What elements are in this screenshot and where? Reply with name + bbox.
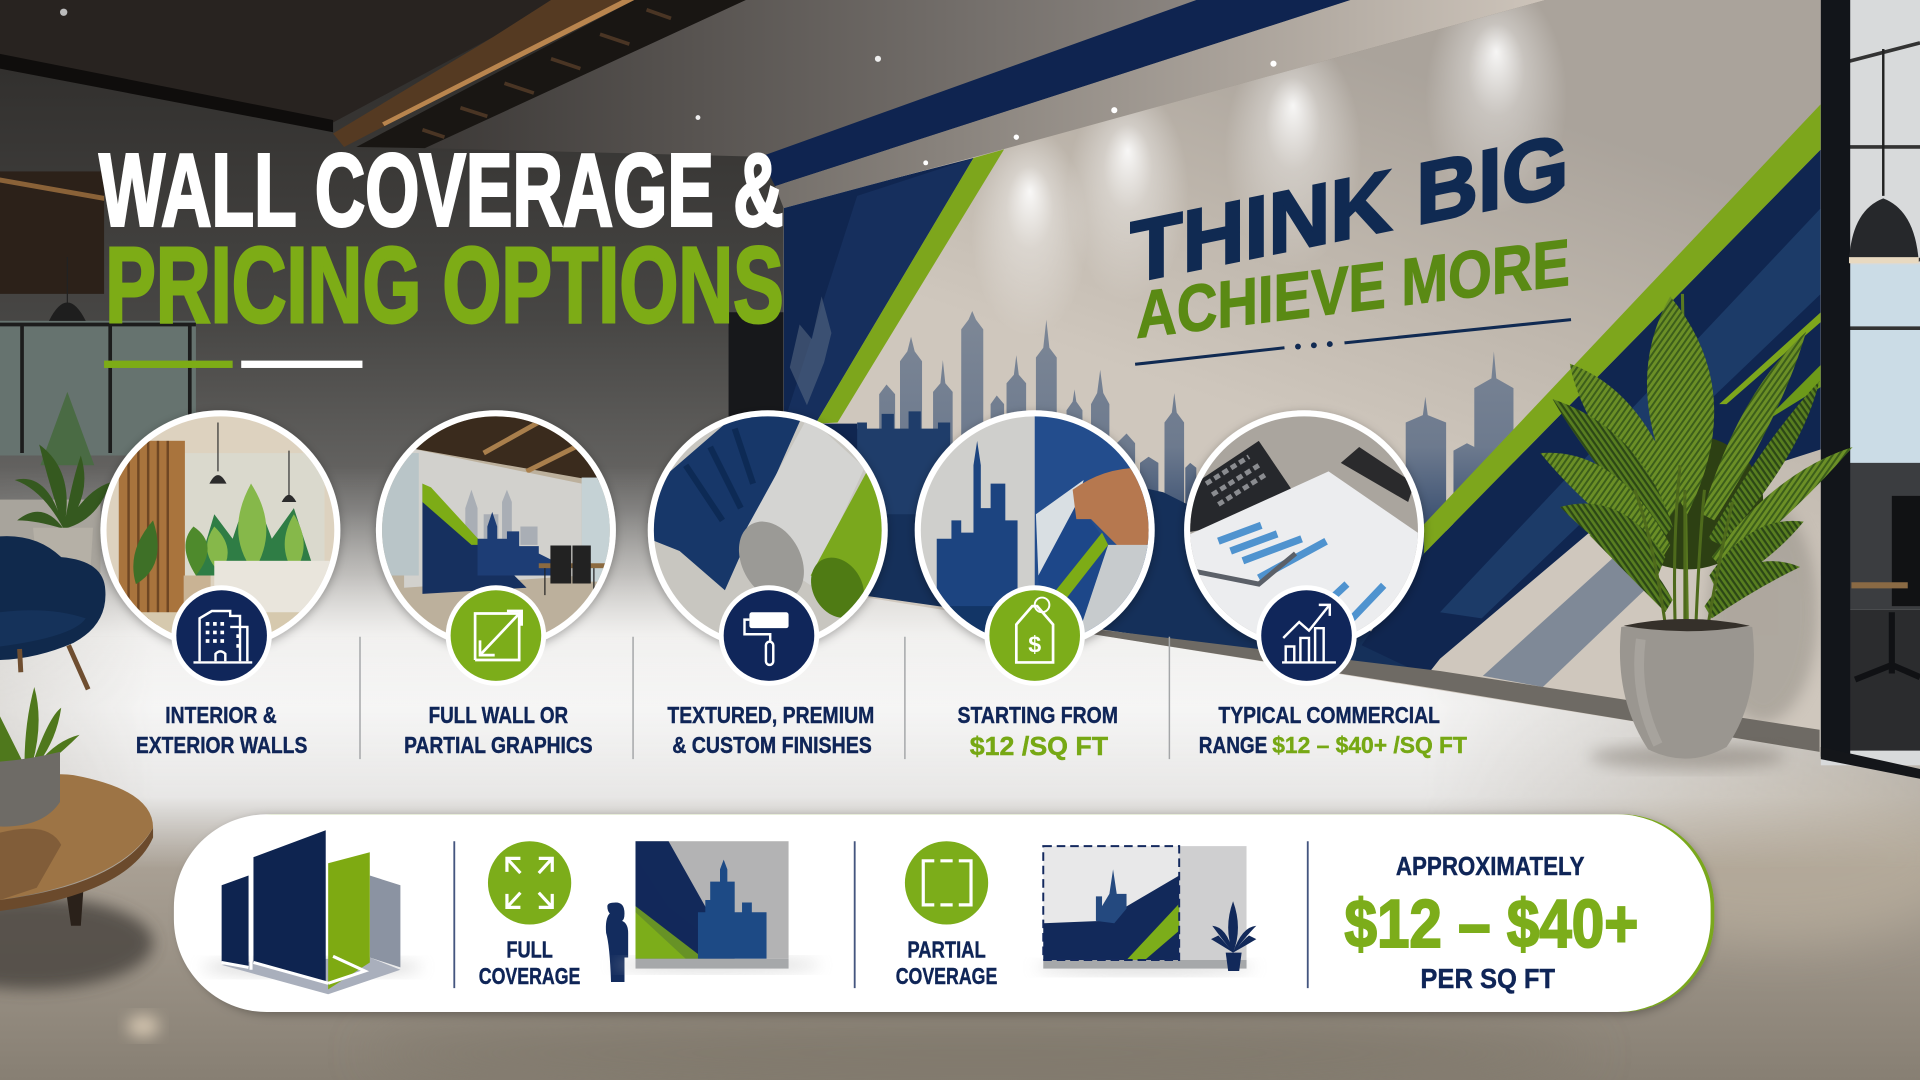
green stripe left (816, 149, 1004, 424)
photo: calculator and charts (1184, 410, 1427, 655)
card: full wall or partial graphics (376, 410, 616, 758)
title (99, 132, 784, 368)
badge: price tag icon: $ (1028, 632, 1041, 658)
badge: paint roller icon (719, 585, 819, 686)
mural navy base (868, 488, 1408, 668)
slogan dots (1295, 341, 1333, 349)
label: STARTING FROM (958, 702, 1118, 728)
pot shadow on wall (1708, 502, 1818, 722)
left plant (15, 444, 110, 567)
label: INTERIOR & (165, 702, 277, 728)
label: $12 – $40+ /SQ FT (1272, 732, 1467, 758)
label (667, 702, 874, 758)
partial coverage plant (1211, 901, 1256, 971)
label: $12 /SQ FT (970, 733, 1108, 761)
grey wall stripe (1483, 557, 1646, 687)
label: FULL WALL OR (429, 702, 568, 728)
icon: wall panels (202, 830, 422, 994)
slogan divider (1135, 320, 1571, 364)
label: TYPICAL COMMERCIAL (1218, 702, 1440, 728)
label (958, 702, 1118, 761)
price callout: PER SQ FT (1420, 963, 1555, 994)
plant pot (1620, 621, 1754, 759)
armchair (0, 536, 105, 689)
potted plant on the right (1540, 294, 1853, 769)
slogan: think big: THINK BIG (1130, 114, 1569, 302)
left lobby furniture (0, 444, 153, 989)
badge: price tag icon (984, 585, 1085, 686)
plant fronds (1540, 294, 1853, 624)
label: PARTIAL GRAPHICS (404, 732, 593, 758)
partial coverage label: PARTIAL (907, 937, 986, 963)
wall spotlights (982, 6, 1557, 306)
coffee table (0, 774, 153, 926)
icon: full coverage (488, 841, 571, 924)
badge: expand icon (446, 585, 546, 686)
skyline towers (879, 311, 1513, 576)
baseboard (1078, 627, 1820, 752)
figure silhouette (606, 902, 628, 982)
full coverage label: FULL (506, 937, 553, 963)
navy shard (779, 158, 973, 465)
printed feature wall (779, 0, 1821, 752)
panel background (174, 814, 1714, 1012)
price callout: APPROXIMATELY (1396, 853, 1584, 881)
icon: partial coverage (905, 841, 988, 924)
photo: lobby (100, 410, 340, 661)
badge: growth chart icon (1256, 585, 1357, 686)
partial coverage mural (1035, 846, 1255, 973)
card: starting from $12 per sq ft (915, 410, 1157, 761)
label (404, 702, 593, 758)
photo: hand peeling wallcovering (915, 410, 1157, 655)
table plant (0, 687, 80, 827)
label: TEXTURED, PREMIUM (667, 702, 874, 728)
label: EXTERIOR WALLS (136, 732, 307, 758)
card: typical commercial range (1184, 410, 1467, 758)
label: & CUSTOM FINISHES (672, 732, 872, 758)
full coverage label: COVERAGE (479, 963, 580, 989)
floor fade overlay (0, 465, 1920, 869)
table shadow (0, 896, 153, 989)
title line 1: WALL COVERAGE & (99, 132, 784, 247)
slogan: achieve more: ACHIEVE MORE (1136, 226, 1570, 353)
recessed ceiling lights (696, 56, 881, 120)
card: interior and exterior walls (100, 410, 340, 758)
right navy band (1362, 149, 1821, 676)
bottom pricing panel (174, 814, 1714, 1012)
soffit and navy fascia (760, 0, 1545, 208)
partial coverage label: COVERAGE (896, 963, 997, 989)
full coverage mural (612, 841, 820, 971)
price callout: $12 – $40+ (1344, 887, 1638, 962)
photo: office mural (376, 410, 616, 655)
label (1199, 702, 1467, 758)
badge: building icon (171, 585, 272, 686)
glass partition and right office (1821, 0, 1920, 779)
counter behind chair (0, 500, 100, 573)
wall slogan (1130, 114, 1571, 364)
title accent bars (104, 361, 362, 368)
right green stripe (1424, 104, 1821, 553)
label: RANGE (1199, 732, 1267, 758)
partial coverage label (896, 937, 997, 989)
price callout (1344, 853, 1638, 994)
card: textured, premium and custom finishes (648, 410, 894, 758)
dividers (360, 637, 1169, 759)
title line 2: PRICING OPTIONS (105, 224, 784, 345)
photo: material rolls (648, 410, 894, 655)
full coverage label (479, 937, 580, 989)
label (136, 702, 307, 758)
